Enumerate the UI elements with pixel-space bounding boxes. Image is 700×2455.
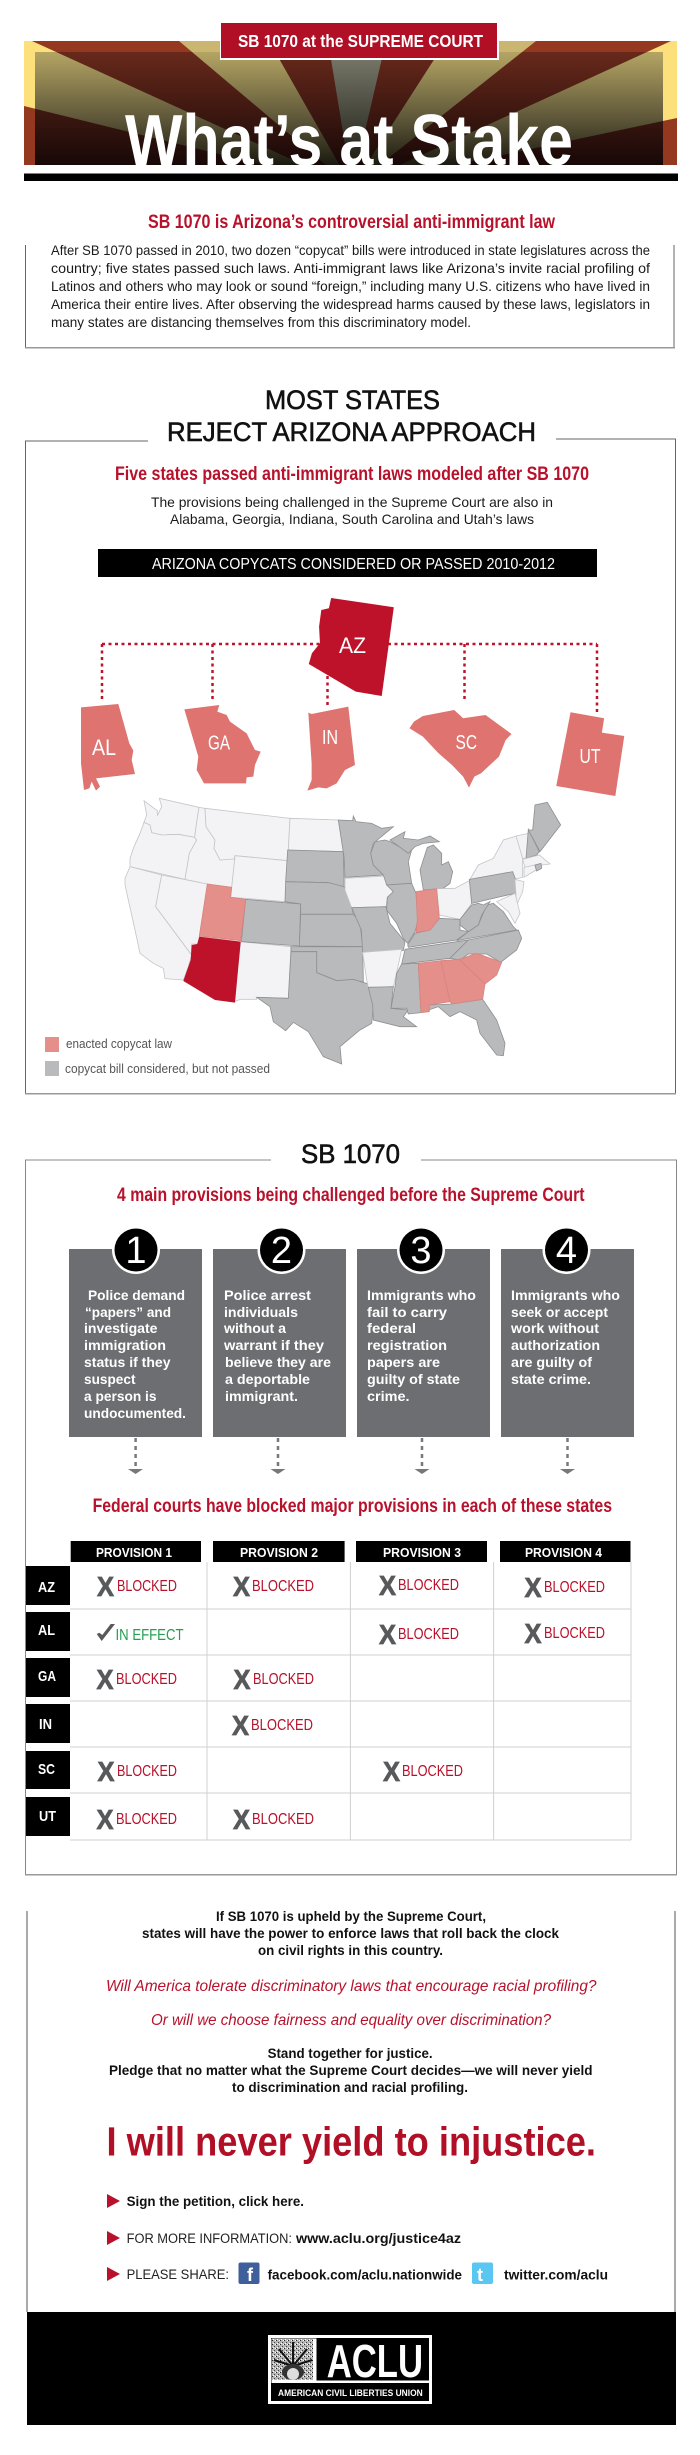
- US map: [125, 798, 561, 1064]
- black rule: [24, 174, 678, 181]
- icon: Georgia: GA: [208, 732, 230, 754]
- action: please share: twitter.com/aclu: [504, 2268, 608, 2282]
- questions: [106, 1978, 597, 2029]
- provision card 1: immigration: [84, 1337, 166, 1353]
- header tag: SB 1070 at the SUPREME COURT: [238, 31, 483, 51]
- questions: Or will we choose fairness and equality over discrimination?: [151, 2012, 551, 2029]
- row AL: X: [379, 1619, 396, 1650]
- row GA: X: [234, 1664, 251, 1695]
- questions: Will America tolerate discriminatory laws that encourage racial profiling?: [106, 1978, 597, 1995]
- ACLU logo: ACLU: [327, 2335, 423, 2387]
- pledge statement: [109, 2045, 592, 2095]
- provision card 4: seek or accept: [511, 1304, 608, 1320]
- row SC: BLOCKED: [117, 1763, 177, 1780]
- icon: twitter: t: [477, 2265, 483, 2285]
- row AZ: X: [233, 1571, 250, 1602]
- row AZ: X: [97, 1571, 114, 1602]
- row AZ: BLOCKED: [398, 1577, 459, 1594]
- panel: intro text: many states are distancing themselves from this discriminatory model.: [51, 314, 471, 330]
- row UT: BLOCKED: [116, 1811, 177, 1828]
- section heading: SB 1070: SB 1070: [301, 1139, 400, 1169]
- provision card 4: [501, 1226, 634, 1437]
- black bar title: ARIZONA COPYCATS CONSIDERED OR PASSED 2010-2012: [152, 556, 555, 573]
- upheld statement: If SB 1070 is upheld by the Supreme Court,: [216, 1908, 486, 1924]
- provision card 2: a deportable: [225, 1371, 310, 1387]
- row AZ: BLOCKED: [117, 1578, 177, 1595]
- upheld statement: on civil rights in this country.: [258, 1942, 443, 1958]
- icon: twitter: [472, 2262, 493, 2285]
- action: please share: PLEASE SHARE:: [127, 2267, 229, 2282]
- title: What’s at Stake: [125, 101, 573, 181]
- row AZ: BLOCKED: [252, 1578, 314, 1595]
- table row labels: IN: [39, 1716, 52, 1733]
- provision card 1: suspect: [84, 1371, 136, 1387]
- row SC: [98, 1756, 463, 1787]
- provision card 1: [69, 1226, 202, 1437]
- pledge statement: Pledge that no matter what the Supreme Court decides—we will never yield: [109, 2062, 592, 2078]
- upheld statement: [142, 1908, 559, 1958]
- copycat subtext: [151, 494, 553, 527]
- copycat subtext: Alabama, Georgia, Indiana, South Carolina and Utah’s laws: [170, 511, 534, 527]
- row GA: BLOCKED: [116, 1671, 177, 1688]
- header banner: [24, 41, 677, 165]
- black bar title: [98, 549, 597, 577]
- upheld statement: states will have the power to enforce laws that roll back the clock: [142, 1925, 559, 1941]
- action: sign petition: Sign the petition, click here.: [127, 2194, 304, 2209]
- provision card 2: without a: [223, 1320, 286, 1336]
- action: please share: facebook.com/aclu.nationwide: [268, 2268, 462, 2282]
- table header: PROVISION 1: [96, 1545, 172, 1560]
- intro heading: SB 1070 is Arizona’s controversial anti-immigrant law: [148, 212, 555, 233]
- panel: intro text: After SB 1070 passed in 2010, two dozen “copycat” bills were introduced in state legislatures across the: [51, 242, 650, 258]
- panel: call to action: [27, 1911, 675, 2312]
- row UT: BLOCKED: [252, 1811, 314, 1828]
- header tag: [220, 22, 499, 60]
- row AL: [97, 1618, 605, 1650]
- table grid lines: [70, 1562, 631, 1840]
- icon: Utah: [556, 712, 624, 796]
- icon: Alabama: AL: [92, 735, 116, 760]
- map legend: copycat bill considered, but not passed: [65, 1062, 270, 1076]
- provision card 1: 1: [125, 1230, 147, 1272]
- provision card 4: 4: [556, 1230, 577, 1272]
- row IN: BLOCKED: [251, 1717, 313, 1734]
- row AZ: X: [524, 1572, 542, 1603]
- provision card 3: guilty of state: [367, 1371, 460, 1387]
- provision card 3: 3: [410, 1230, 432, 1272]
- provision card 3: registration: [367, 1337, 447, 1353]
- provision card 3: [357, 1226, 490, 1437]
- map legend: [45, 1037, 270, 1076]
- section heading: most states: [167, 385, 536, 447]
- row AZ: X: [379, 1570, 396, 1601]
- provision card 2: [213, 1226, 346, 1437]
- row AL: BLOCKED: [544, 1625, 605, 1642]
- row UT: X: [233, 1804, 250, 1835]
- provisions heading: 4 main provisions being challenged before the Supreme Court: [117, 1185, 585, 1206]
- icon: Indiana: IN: [322, 727, 338, 749]
- action: more information: [107, 2231, 461, 2246]
- footer band: [27, 2312, 676, 2425]
- provision card 3: federal: [367, 1320, 416, 1336]
- pledge statement: Stand together for justice.: [268, 2045, 433, 2061]
- pledge headline: I will never yield to injustice.: [106, 2118, 596, 2164]
- pledge statement: to discrimination and racial profiling.: [232, 2079, 468, 2095]
- table header: PROVISION 2: [240, 1545, 318, 1560]
- dashed arrows: [128, 1438, 575, 1474]
- icon: facebook: f: [247, 2265, 254, 2285]
- provision card 2: believe they are: [225, 1354, 331, 1370]
- icon: Indiana: [307, 707, 355, 791]
- provision card 4: authorization: [511, 1337, 600, 1353]
- action: more information: FOR MORE INFORMATION:: [127, 2231, 292, 2246]
- provision card 3: papers are: [367, 1354, 440, 1370]
- table row labels: GA: [38, 1668, 56, 1685]
- action: more information: www.aclu.org/justice4az: [295, 2231, 461, 2246]
- section heading: most states: REJECT ARIZONA APPROACH: [167, 417, 536, 447]
- table cells: [96, 1570, 605, 1835]
- row SC: X: [98, 1756, 115, 1787]
- copycat subtext: The provisions being challenged in the Supreme Court are also in: [151, 494, 553, 510]
- icon: Arizona: [309, 598, 394, 696]
- provision card 4: work without: [510, 1320, 599, 1336]
- provision card 4: Immigrants who: [511, 1287, 620, 1303]
- row UT: X: [96, 1804, 114, 1835]
- copycat heading: Five states passed anti-immigrant laws modeled after SB 1070: [115, 464, 589, 485]
- provision card 4: are guilty of: [511, 1354, 592, 1370]
- icon: South Carolina: SC: [456, 732, 477, 754]
- provision card 2: Police arrest: [224, 1287, 311, 1303]
- provision card 1: undocumented.: [84, 1405, 186, 1421]
- row SC: X: [383, 1756, 400, 1787]
- dotted connector lines: [102, 644, 597, 712]
- provision card 1: a person is: [84, 1388, 157, 1404]
- panel: intro text: Latinos and others who may look or sound “foreign,” including many U.S. citizens who have lived in: [51, 278, 650, 294]
- provision card 3: crime.: [367, 1388, 410, 1404]
- provision card 1: investigate: [84, 1320, 158, 1336]
- row UT: [96, 1804, 314, 1835]
- panel: intro text: America their entire lives. After observing the widespread harms caused by these laws, legislators in: [51, 296, 650, 312]
- table row labels: AZ: [38, 1579, 55, 1596]
- table header: [71, 1541, 630, 1562]
- row IN: [232, 1710, 313, 1741]
- federal courts heading: Federal courts have blocked major provisions in each of these states: [93, 1496, 612, 1517]
- ACLU logo: AMERICAN CIVIL LIBERTIES UNION: [278, 2388, 423, 2399]
- row AZ: [97, 1570, 605, 1603]
- icon: facebook: [238, 2262, 260, 2285]
- row GA: X: [96, 1664, 114, 1695]
- provision card 4: state crime.: [511, 1371, 591, 1387]
- provision card 3: fail to carry: [367, 1304, 447, 1320]
- provision card 2: warrant if they: [223, 1337, 324, 1353]
- row AL: IN EFFECT: [116, 1627, 184, 1644]
- row AZ: BLOCKED: [544, 1579, 605, 1596]
- ACLU logo: [268, 2335, 432, 2404]
- provision card 2: individuals: [224, 1304, 298, 1320]
- panel: copycat states: [25, 439, 676, 1094]
- provision card 3: Immigrants who: [367, 1287, 476, 1303]
- icon: Utah: UT: [580, 746, 600, 768]
- icon: Alabama: [81, 704, 135, 791]
- panel: intro text: [25, 242, 675, 348]
- section heading: most states: MOST STATES: [265, 385, 440, 415]
- table row labels: UT: [39, 1808, 56, 1825]
- provision card 2: immigrant.: [225, 1388, 298, 1404]
- row AL: BLOCKED: [398, 1626, 459, 1643]
- row IN: X: [232, 1710, 249, 1741]
- table header: PROVISION 3: [383, 1545, 461, 1560]
- row SC: BLOCKED: [402, 1763, 463, 1780]
- panel: provisions: [25, 1160, 677, 1876]
- provision card 1: “papers” and: [85, 1304, 171, 1320]
- row GA: [96, 1664, 314, 1695]
- row AL: X: [524, 1618, 542, 1649]
- row GA: BLOCKED: [253, 1671, 314, 1688]
- table header: PROVISION 4: [525, 1545, 603, 1560]
- action: please share: [107, 2262, 608, 2285]
- provision card 2: 2: [271, 1230, 292, 1272]
- panel: intro text: country; five states passed such laws. Anti-immigrant laws like Arizona’s invite racial profiling of: [51, 260, 650, 276]
- provision card 1: status if they: [84, 1354, 171, 1370]
- provision card 1: Police demand: [88, 1287, 185, 1303]
- icon: Georgia: [184, 705, 261, 783]
- map legend: enacted copycat law: [66, 1037, 173, 1051]
- icon: South Carolina: [409, 710, 511, 788]
- icon: Arizona: AZ: [339, 633, 366, 658]
- table row labels: [26, 1566, 70, 1836]
- table row labels: AL: [38, 1622, 55, 1639]
- table row labels: SC: [38, 1761, 55, 1778]
